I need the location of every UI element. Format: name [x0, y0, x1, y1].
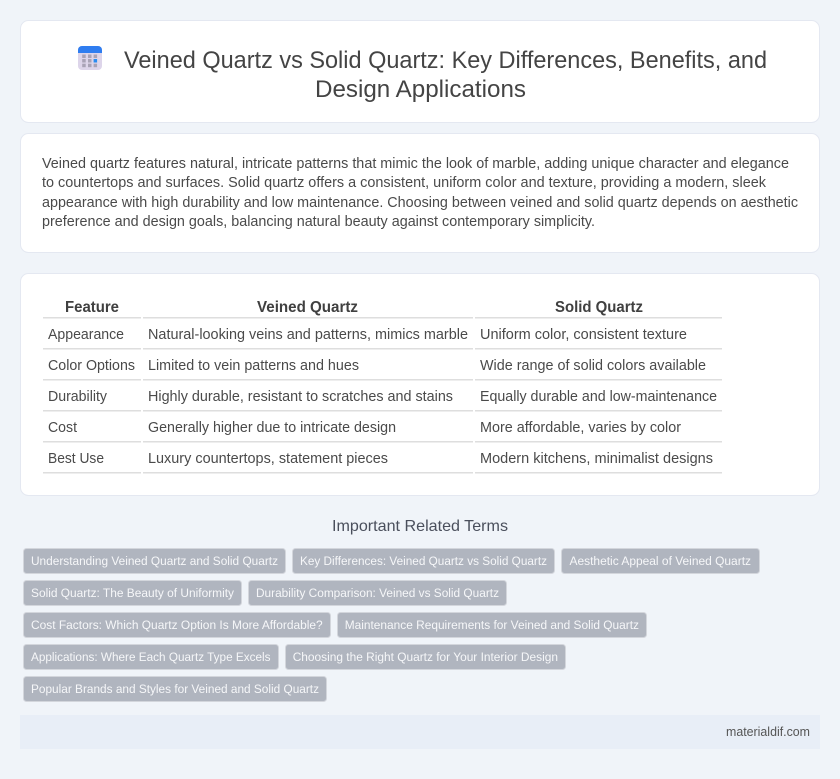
related terms tags [24, 548, 760, 702]
title [124, 47, 767, 103]
table row: color options: Wide range of solid colors available [480, 358, 706, 374]
table row: appearance: Appearance [48, 327, 124, 343]
table row: color options: Color Options [48, 358, 135, 374]
tag: applications: Applications: Where Each Quartz Type Excels [31, 650, 270, 664]
text block: introduction paragraph: to countertops and surfaces. Solid quartz offers a consistent, uniform color and texture, providing a modern, sleek [42, 175, 767, 191]
panel: title card [20, 20, 820, 122]
table row: durability: Highly durable, resistant to scratches and stains [148, 389, 453, 405]
table header: Veined Quartz [257, 299, 358, 316]
tag: cost factors: Cost Factors: Which Quartz Option Is More Affordable? [31, 618, 323, 632]
footer [20, 715, 820, 749]
tag: durability comparison: Durability Comparison: Veined vs Solid Quartz [256, 586, 499, 600]
table row: color options [43, 358, 722, 380]
table row: appearance: Uniform color, consistent texture [480, 327, 687, 343]
table row: best use: Luxury countertops, statement pieces [148, 451, 388, 467]
tag: choosing: Choosing the Right Quartz for Your Interior Design [293, 650, 558, 664]
text block: introduction paragraph: preference and design goals, balancing natural beauty against contemporary simplicity. [42, 214, 595, 230]
text block: introduction paragraph [42, 156, 798, 230]
footer source link: materialdif.com [726, 725, 810, 739]
table header [43, 299, 722, 318]
heading: important related terms: Important Related Terms [332, 518, 508, 535]
panel: comparison table [20, 274, 820, 496]
text block: introduction paragraph: Veined quartz features natural, intricate patterns that mimic the look of marble, adding unique character and elegance [42, 156, 789, 172]
tag: understanding: Understanding Veined Quartz and Solid Quartz [31, 554, 278, 568]
tag: popular brands: Popular Brands and Styles for Veined and Solid Quartz [31, 682, 319, 696]
tag: solid quartz uniformity: Solid Quartz: The Beauty of Uniformity [31, 586, 235, 600]
title: Veined Quartz vs Solid Quartz: Key Differences, Benefits, and [124, 47, 767, 74]
table row: appearance [43, 327, 722, 350]
table row: durability [43, 389, 722, 412]
table row: best use: Modern kitchens, minimalist designs [480, 451, 713, 467]
text block: introduction paragraph: appearance with high durability and low maintenance. Choosing between veined and solid quartz depends on aesthetic [42, 195, 798, 211]
table row: appearance: Natural-looking veins and patterns, mimics marble [148, 327, 468, 343]
table row: durability: Equally durable and low-maintenance [480, 389, 717, 405]
table header: Feature [65, 299, 119, 316]
table row: best use [43, 451, 722, 474]
table row: best use: Best Use [48, 451, 104, 467]
table row: cost [43, 420, 722, 442]
tag: key differences: Key Differences: Veined Quartz vs Solid Quartz [300, 554, 547, 568]
tag: aesthetic appeal: Aesthetic Appeal of Veined Quartz [570, 554, 751, 568]
table row: durability: Durability [48, 389, 108, 405]
panel: introduction [20, 134, 820, 252]
title: Design Applications [315, 76, 526, 103]
table row: cost: Cost [48, 420, 77, 436]
table row: cost: Generally higher due to intricate design [148, 420, 396, 436]
icon: calendar [78, 46, 102, 70]
table row: color options: Limited to vein patterns and hues [148, 358, 359, 374]
tag: maintenance: Maintenance Requirements for Veined and Solid Quartz [345, 618, 639, 632]
table row: cost: More affordable, varies by color [480, 420, 681, 436]
table header: Solid Quartz [555, 299, 643, 316]
